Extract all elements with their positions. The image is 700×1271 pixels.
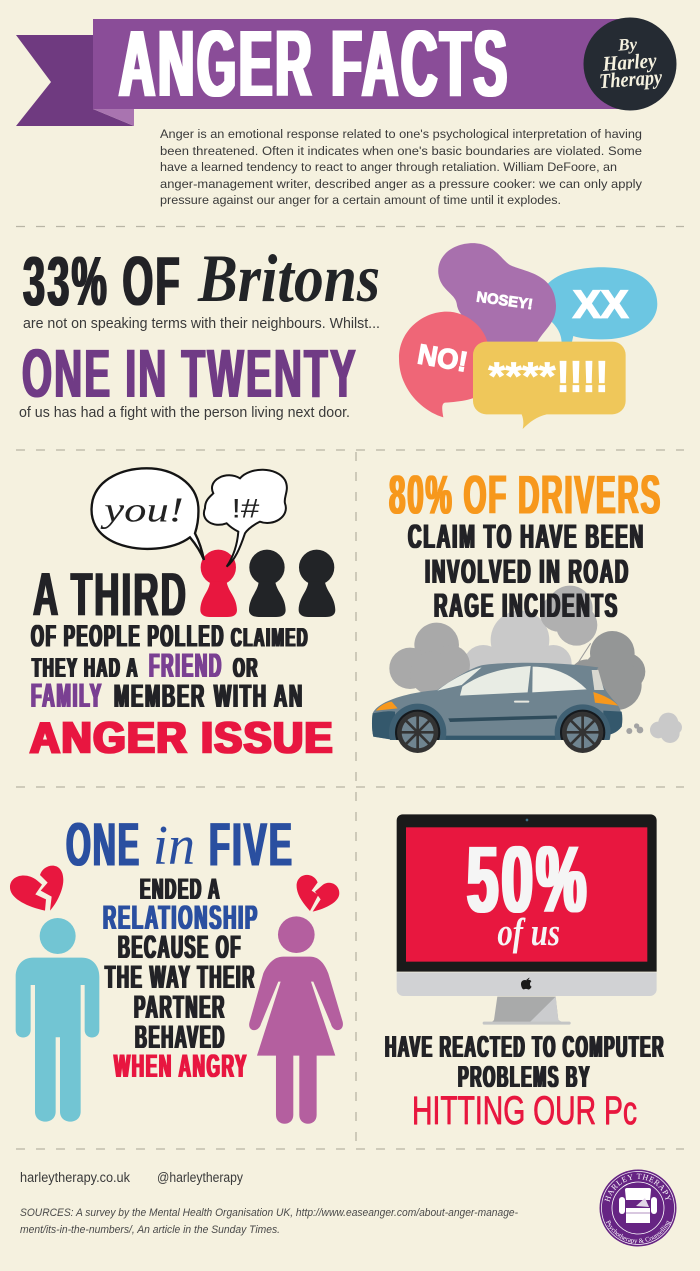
illustration: monitor: [397, 814, 657, 1025]
text: ended a relationship: THE WAY THEIR: [105, 959, 256, 995]
bubble: XX: XX: [573, 284, 629, 327]
smoke: right: [570, 631, 645, 710]
icon: black pawn: [299, 550, 335, 617]
monitor stand: [483, 997, 571, 1025]
panel: road rage: [372, 464, 682, 767]
icon: armchair: [619, 1188, 657, 1223]
speech bubble: symbols: !#: [232, 494, 260, 524]
text: people polled: OF PEOPLE POLLED: [31, 618, 225, 654]
figures and hearts: [10, 866, 343, 1124]
icon: black pawn: [249, 550, 286, 617]
heading: one in five: [66, 810, 294, 878]
bubble: swearing: !!!!: [557, 353, 608, 402]
panel: computer: [385, 814, 665, 1133]
panel: neighbours: [19, 240, 380, 421]
icon: broken heart left: [10, 866, 63, 911]
intro paragraph: Anger is an emotional response related to one's psychological interpretation of having: [160, 127, 642, 141]
monitor chin: [397, 972, 657, 996]
text: ended a relationship: ENDED A: [140, 873, 221, 906]
text: people polled: MEMBER: [114, 678, 206, 714]
badge: by Harley Therapy: By: [617, 34, 638, 55]
heading: one in five: ONE: [66, 810, 141, 878]
text: claim road rage: [408, 518, 645, 625]
text: reacted to computer problems: [385, 1030, 665, 1094]
sources: ment/its-in-the-numbers/, An article in the Sunday Times.: [20, 1224, 280, 1236]
wheel: [562, 712, 603, 753]
heading: a third: A THIRD: [33, 560, 188, 628]
heading: one in twenty: ONE IN TWENTY: [22, 335, 358, 412]
intro paragraph: [160, 127, 643, 207]
heading: one in five: FIVE: [209, 810, 294, 878]
header banner: [16, 11, 676, 126]
ribbon body: [93, 19, 633, 109]
text: people polled: WITH AN: [214, 678, 304, 714]
panel: a third: [30, 468, 335, 762]
icon: apple logo: [521, 978, 532, 989]
logo: Harley Therapy: HARLEY THERAPY: [604, 1174, 672, 1202]
monitor bezel: [397, 814, 657, 972]
bubble: nosey: [438, 243, 556, 343]
logo: Harley Therapy: Psychotherapy & Counselling: [606, 1220, 671, 1244]
sources: [20, 1207, 518, 1236]
badge: by Harley Therapy: Therapy: [598, 65, 663, 93]
monitor screen: [406, 827, 647, 962]
text: ended a relationship: BECAUSE OF: [118, 929, 242, 965]
smoke: top: [540, 586, 597, 646]
icon: broken heart right: [297, 875, 339, 912]
icon: man: [16, 918, 99, 1122]
text: people polled: CLAIMED: [231, 622, 309, 652]
text: ended a relationship: PARTNER: [134, 989, 226, 1025]
text: ended a relationship: WHEN ANGRY: [114, 1048, 248, 1084]
smoke: left: [389, 623, 470, 695]
intro paragraph: anger-management writer, described anger as a pressure cooker: we can only apply: [160, 177, 643, 191]
footer links: @harleytherapy: [157, 1170, 243, 1185]
icon: woman: [249, 916, 343, 1124]
text: people polled: OR: [233, 652, 259, 683]
stat: 50%: 50%: [467, 827, 590, 933]
car: [372, 643, 622, 767]
footer links: [20, 1170, 243, 1185]
text: ended a relationship: RELATIONSHIP: [103, 899, 259, 937]
icon: speech bubbles: [399, 243, 657, 429]
badge: by Harley Therapy: Harley: [601, 48, 658, 76]
illustration: pawns and speech: [92, 468, 335, 617]
text: of us: of us: [497, 910, 560, 954]
smoke: centre: [463, 611, 572, 685]
footer links: harleytherapy.co.uk: [20, 1170, 130, 1185]
text: people polled: FAMILY: [31, 677, 103, 715]
text: people polled: FRIEND: [149, 647, 223, 685]
logo: Harley Therapy: [600, 1170, 676, 1246]
speech bubble: symbols: [204, 470, 287, 567]
text: people polled: THEY HAD A: [32, 652, 139, 683]
intro paragraph: have a learned tendency to react to anger through retaliation. William DeFoore, an: [160, 160, 617, 174]
bubble: no: [399, 312, 487, 417]
ribbon tail: [16, 35, 134, 126]
badge: by Harley Therapy: [584, 18, 676, 110]
text: ended a relationship: BEHAVED: [135, 1019, 226, 1055]
illustration: car and smoke (back layer): [372, 586, 682, 767]
heading: 33% of Britons: Britons: [197, 240, 380, 316]
heading: anger issue: ANGER ISSUE: [30, 714, 334, 762]
intro paragraph: pressure against our anger for a certain amount of time until it explodes.: [160, 193, 561, 207]
bubble: XX: [547, 267, 657, 343]
ribbon fold: [93, 109, 134, 126]
speech bubble: you: you!: [100, 491, 184, 530]
text: people polled: [31, 618, 309, 715]
heading: one in five: in: [153, 815, 195, 877]
bubble: swearing: [473, 342, 626, 429]
icon: red pawn: [200, 550, 237, 617]
bubble: swearing: ****: [488, 354, 556, 398]
bubble: nosey: NOSEY!: [475, 289, 534, 313]
text: fight with neighbour: of us has had a fight with the person living next door.: [19, 405, 350, 421]
wheel: [397, 712, 438, 753]
exhaust puffs: [626, 713, 682, 743]
bubble: no: NO!: [415, 338, 470, 378]
intro paragraph: been threatened. Often it indicates when one's basic boundaries are violated. Some: [160, 144, 642, 158]
text: ended a relationship: [103, 873, 259, 1084]
heading: 33% of Britons: 33% OF: [23, 242, 182, 320]
text: not on speaking terms: are not on speaking terms with their neighbours. Whilst...: [23, 316, 380, 332]
sources: SOURCES: A survey by the Mental Health Organisation UK, http://www.easeanger.com/about-anger-manage-: [20, 1207, 518, 1219]
speech bubble: you: [92, 468, 204, 560]
panel: relationships: [10, 810, 343, 1124]
